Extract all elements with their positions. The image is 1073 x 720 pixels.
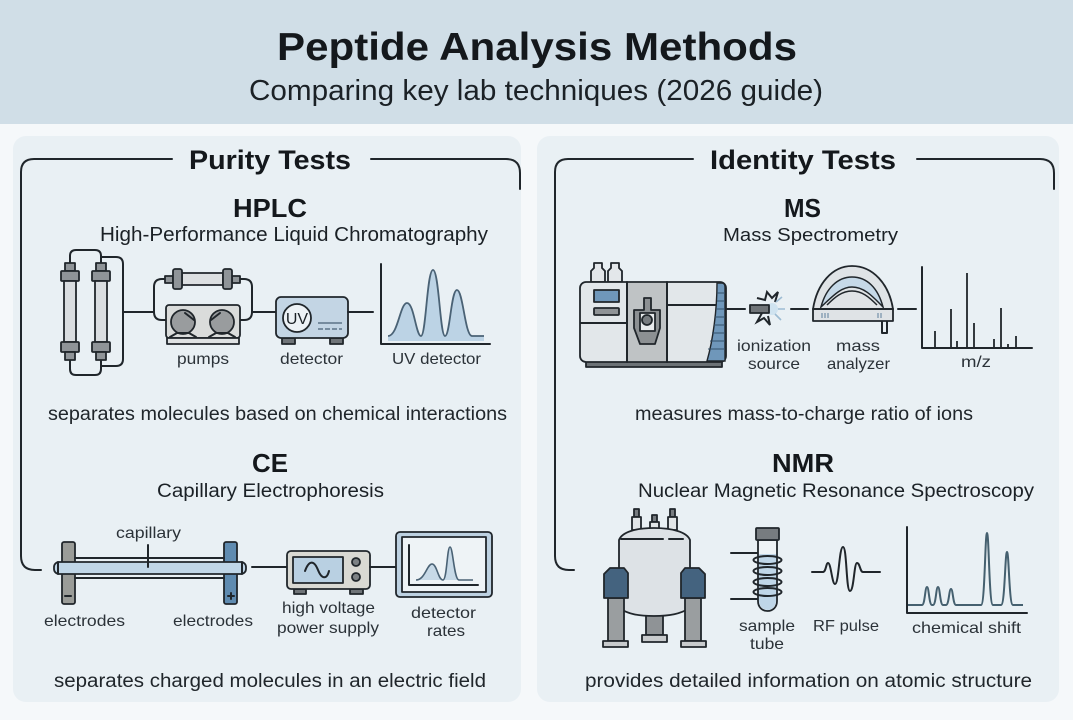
label: detector rates: detector xyxy=(411,605,477,622)
label: ionization source: source xyxy=(748,356,800,373)
icon: NMR magnet xyxy=(603,509,706,647)
label: detector: detector xyxy=(280,351,344,368)
label: electrode left: electrodes xyxy=(44,613,125,630)
label: sample tube xyxy=(739,618,795,653)
label: sample tube: sample xyxy=(739,618,795,635)
panel: purity tests xyxy=(13,136,521,702)
section title: MS: MS xyxy=(784,193,821,223)
chart: mass spectrum xyxy=(922,267,1032,348)
icon: capillary with electrodes xyxy=(54,542,246,604)
section subtitle: MS: Mass Spectrometry xyxy=(723,225,898,245)
description: MS: measures mass-to-charge ratio of ions xyxy=(635,404,973,425)
label: mass analyzer: mass xyxy=(836,338,880,355)
icon: pumps xyxy=(154,269,252,344)
icon: detector monitor xyxy=(396,532,492,597)
chart: UV chromatogram xyxy=(381,264,490,344)
section subtitle: CE: Capillary Electrophoresis xyxy=(157,481,384,502)
label: high voltage power supply xyxy=(277,600,379,637)
icon: RF pulse xyxy=(812,547,880,591)
label: capillary: capillary xyxy=(116,525,181,542)
description: CE: separates charged molecules in an electric field xyxy=(54,671,486,692)
header banner xyxy=(0,0,1073,124)
subtitle: Comparing key lab techniques (2026 guide) xyxy=(249,75,823,107)
section title: HPLC: HPLC xyxy=(233,193,307,223)
label: ionization source: ionization xyxy=(737,338,811,355)
section subtitle: HPLC: High-Performance Liquid Chromatography xyxy=(100,224,488,246)
section title: NMR: NMR xyxy=(772,448,834,478)
label: detector rates: rates xyxy=(427,623,465,640)
panel: identity tests xyxy=(537,136,1059,702)
label: high voltage power supply: high voltage xyxy=(282,600,375,617)
icon: UV detector box: UV xyxy=(286,311,308,328)
section title: CE: CE xyxy=(252,448,288,478)
icon: high voltage power supply xyxy=(287,551,370,594)
label: electrode right: electrodes xyxy=(173,613,253,630)
label: mass analyzer xyxy=(827,338,891,373)
label: pumps: pumps xyxy=(177,351,229,368)
label: m/z: m/z xyxy=(961,354,991,371)
description: NMR: provides detailed information on atomic structure xyxy=(585,671,1032,692)
label: ionization source xyxy=(737,338,811,373)
label: high voltage power supply: power supply xyxy=(277,620,379,637)
description: HPLC: separates molecules based on chemical interactions xyxy=(48,404,507,425)
label: chemical shift: chemical shift xyxy=(912,620,1022,637)
title: Peptide Analysis Methods xyxy=(277,26,797,69)
label: mass analyzer: analyzer xyxy=(827,356,891,373)
heading: purity tests: Purity Tests xyxy=(189,145,351,175)
icon: HPLC columns xyxy=(61,250,123,375)
label: RF pulse: RF pulse xyxy=(813,618,879,635)
section subtitle: NMR: Nuclear Magnetic Resonance Spectroscopy xyxy=(638,481,1035,502)
icon: mass spectrometer instrument xyxy=(580,263,726,367)
chart: NMR spectrum xyxy=(907,527,1027,613)
heading: identity tests: Identity Tests xyxy=(710,145,896,175)
label: UV detector: UV detector xyxy=(392,351,482,368)
panel bracket: identity xyxy=(555,159,1054,570)
panel bracket: purity xyxy=(21,159,520,570)
label: detector rates xyxy=(411,605,477,640)
icon: mass analyzer xyxy=(813,266,893,333)
icon: UV detector box xyxy=(276,297,348,344)
icon: sample tube with coil xyxy=(731,528,782,611)
label: sample tube: tube xyxy=(750,636,784,653)
icon: ionization source xyxy=(750,292,785,325)
